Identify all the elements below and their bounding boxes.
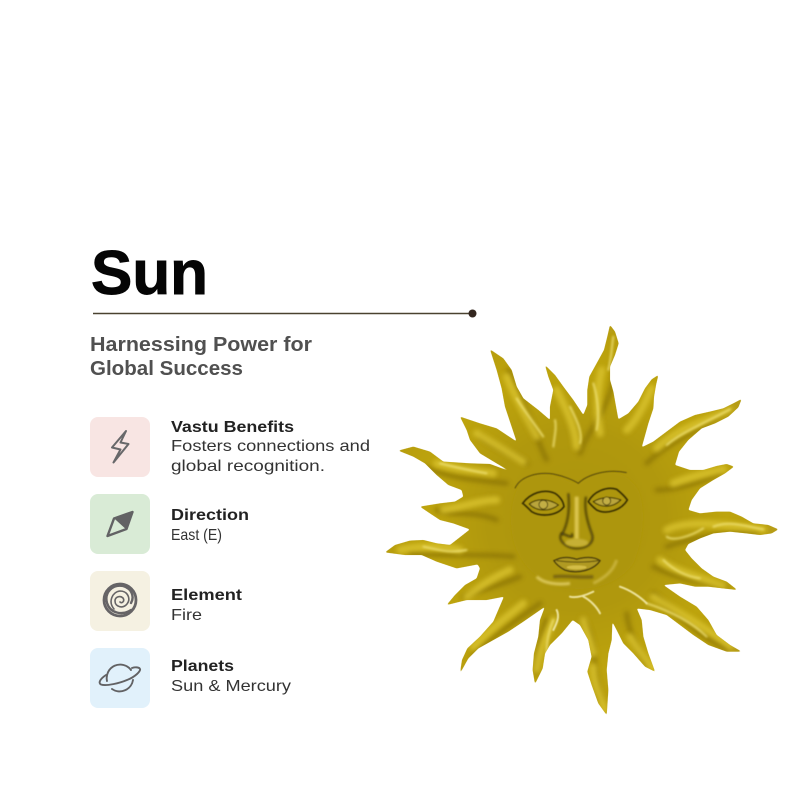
right eye — [588, 488, 627, 512]
text: direction: East (E) — [171, 527, 222, 544]
text: direction: Direction — [171, 507, 249, 524]
bright ray highlights — [400, 370, 763, 710]
panel: planets — [90, 648, 291, 708]
text: planets: Planets — [171, 658, 234, 675]
brow line — [515, 471, 627, 488]
text: element: Fire — [171, 607, 202, 624]
face disc — [511, 471, 643, 589]
text: planets — [171, 658, 291, 695]
text: vastu benefits: Fosters connections and — [171, 438, 370, 455]
panel: element — [90, 571, 242, 631]
title: Sun — [91, 239, 208, 308]
lips — [554, 557, 600, 572]
panel: vastu benefits — [90, 417, 370, 477]
brass sun face sculpture — [385, 325, 778, 715]
text: direction — [171, 507, 249, 544]
ray shading — [400, 337, 763, 710]
crisp specular highlights — [423, 337, 763, 653]
left eye — [523, 491, 564, 515]
subtitle: Global Success — [90, 358, 243, 380]
text: planets: Sun & Mercury — [171, 678, 291, 695]
icon: spiral — [90, 571, 150, 631]
text: element: Element — [171, 587, 242, 604]
panel: direction — [90, 494, 249, 554]
lower collar highlights — [553, 587, 647, 630]
subtitle — [90, 334, 312, 380]
dark ray streaks — [410, 363, 757, 700]
nose — [560, 493, 593, 548]
text: vastu benefits: global recognition. — [171, 458, 325, 475]
divider line with dot — [93, 310, 476, 318]
sun silhouette — [385, 325, 778, 715]
icon: lightning bolt — [90, 417, 150, 477]
subtitle: Harnessing Power for — [90, 334, 312, 356]
text: vastu benefits: Vastu Benefits — [171, 419, 294, 436]
icon: ringed planet — [90, 648, 150, 708]
text: element — [171, 587, 242, 624]
icon: compass needle — [90, 494, 150, 554]
chin and cheek highlights — [537, 560, 617, 584]
text: vastu benefits — [171, 419, 370, 475]
